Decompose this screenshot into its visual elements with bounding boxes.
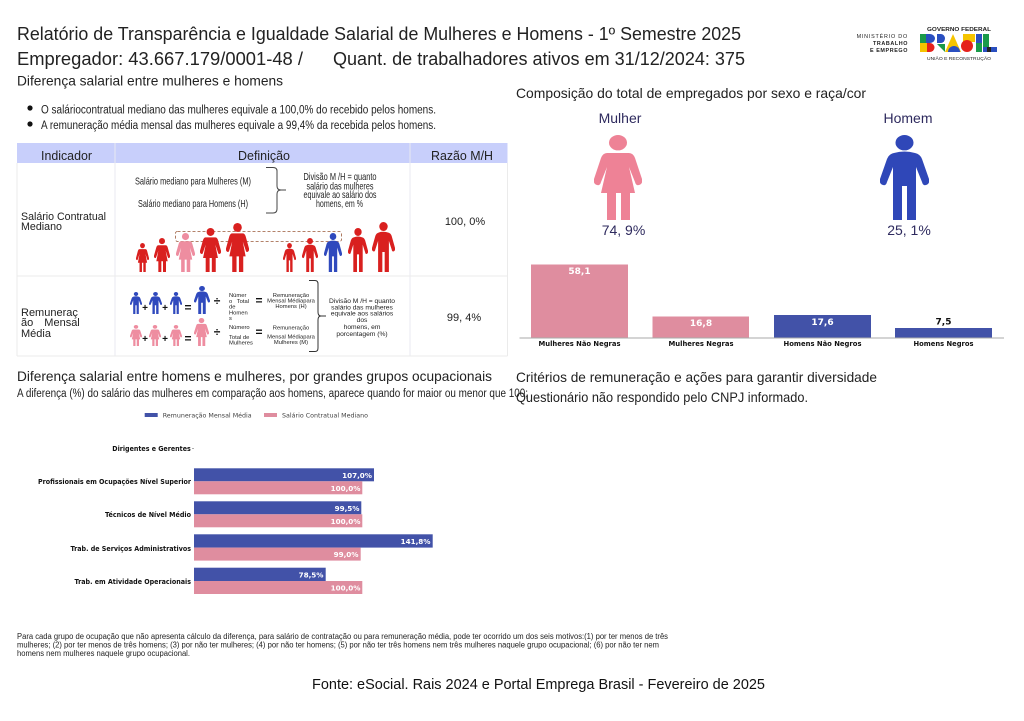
row label: remuneração <box>21 307 80 340</box>
footnote: Para cada grupo de ocupação que não apresenta cálculo da diferença, para salário de contratação ou para remuneração média, pode ter ocorrido um dos seis motivos:(1) por ter menos de três <box>17 632 668 641</box>
bars: operacionais: 100,0% <box>331 584 360 592</box>
logo: ministério and governo federal: MINISTÉRIO DO <box>857 33 908 40</box>
brace <box>309 280 326 352</box>
definition: número de homens e mulheres: de <box>229 304 235 310</box>
bar chart: composição por sexo e raça: Mulheres Não Negras <box>538 340 620 348</box>
text: questionário: Questionário não respondido pelo CNPJ informado. <box>516 389 808 405</box>
definition: salário mediano <box>135 168 377 213</box>
category labels: Trab. de Serviços Administrativos <box>70 545 191 553</box>
table header: Indicador <box>41 148 93 163</box>
bullet list: A remuneração média mensal das mulheres equivale a 99,4% da recebida pelos homens. <box>41 120 436 132</box>
icons: remuneração homens: = <box>184 300 192 314</box>
bars: administrativos: 99,0% <box>334 550 358 559</box>
category labels <box>38 445 194 586</box>
icons: remuneração homens: = <box>255 294 263 308</box>
definition: divisão M/H: equivale aos salários <box>331 310 394 318</box>
heading: critérios de remuneração: Critérios de remuneração e ações para garantir diversidade <box>516 369 877 385</box>
heading: diferença por grupos ocupacionais: Diferença salarial entre homens e mulheres, por grandes grupos ocupacionais <box>17 368 492 384</box>
definition: salário mediano: Divisão M /H = quanto <box>304 171 377 183</box>
bars: administrativos <box>194 534 433 561</box>
icons: remuneração homens: ÷ <box>214 294 221 308</box>
definition: número de homens e mulheres <box>229 293 253 346</box>
logo: ministério and governo federal: E EMPREGO <box>870 48 908 54</box>
bars: operacionais <box>194 568 362 594</box>
icons: remuneração mulheres: ÷ <box>214 325 221 339</box>
panel: tabela de indicadores <box>17 143 508 356</box>
bars: técnicos: 99,5% <box>335 504 360 513</box>
bar chart: composição por sexo e raça: 17,6 <box>811 318 834 328</box>
footnote: homens nem mulheres naquele grupo ocupacional. <box>17 649 190 658</box>
icons: remuneração mulheres: + <box>162 334 168 345</box>
icons: remuneração homens: + <box>162 303 168 314</box>
title: Relatório de Transparência e Igualdade Salarial de Mulheres e Homens - 1º Semestre 2025 <box>17 24 741 44</box>
definition: salário mediano: homens, em % <box>316 198 363 210</box>
definition: salário mediano: salário das mulheres <box>306 180 374 192</box>
definition: número de homens e mulheres: s <box>229 316 232 322</box>
source: Fonte: eSocial. Rais 2024 e Portal Emprega Brasil - Fevereiro de 2025 <box>312 676 765 693</box>
icons: remuneração mulheres: = <box>255 325 263 339</box>
definition: número de homens e mulheres: Total de <box>229 335 249 341</box>
bar chart: composição por sexo e raça <box>520 264 1004 348</box>
bar chart: composição por sexo e raça: Mulheres Negras <box>668 340 734 348</box>
category labels: Técnicos de Nível Médio <box>105 511 191 519</box>
icons: mediana <box>136 222 395 272</box>
employer line: Empregador: 43.667.179/0001-48 / <box>17 49 303 69</box>
icons: remuneração mulheres <box>130 318 263 346</box>
table header: Razão M/H <box>431 148 493 163</box>
category labels: Dirigentes e Gerentes <box>112 445 191 453</box>
category labels: Trab. em Atividade Operacionais <box>74 578 191 586</box>
bars: profissionais: 100,0% <box>331 484 360 493</box>
definition: remuneração mensal média: Remuneração <box>273 293 309 299</box>
row label: salário contratual: Mediano <box>21 221 62 233</box>
definition: divisão M/H <box>329 298 395 338</box>
icons: remuneração mulheres: + <box>142 334 148 345</box>
bullet list: O saláriocontratual mediano das mulheres equivale a 100,0% do recebido pelos homens. <box>41 104 436 116</box>
definition: divisão M/H: Divisão M /H = quanto <box>329 298 395 305</box>
definition: remuneração mensal média: Mensal Médiapara <box>267 334 316 340</box>
definition: remuneração mensal média: Mensal Médiapara <box>267 298 316 304</box>
logo: ministério and governo federal: TRABALHO <box>873 41 908 47</box>
panel: mulher: Mulher <box>599 110 642 126</box>
logo: ministério and governo federal: UNIÃO E RECONSTRUÇÃO <box>927 55 991 62</box>
bars: técnicos <box>194 501 362 527</box>
bar chart: composição por sexo e raça: 16,8 <box>690 319 712 329</box>
panel: mulher: 74, 9% <box>602 222 645 238</box>
heading: diferença salarial: Diferença salarial entre mulheres e homens <box>17 72 283 88</box>
definition: divisão M/H: porcentagem (%) <box>336 331 388 338</box>
definition: remuneração mensal média: Homens (H) <box>275 304 307 310</box>
definition: divisão M/H: salário das mulheres <box>331 304 394 312</box>
definition: número de homens e mulheres: Número <box>229 325 250 331</box>
bar chart: grupos ocupacionais <box>38 445 433 594</box>
category labels: Profissionais em Ocupações Nível Superior <box>38 478 192 486</box>
employer line: Quant. de trabalhadores ativos em 31/12/2024: 375 <box>333 49 745 69</box>
panel: mulher <box>594 110 645 238</box>
bars: profissionais: 107,0% <box>342 471 372 480</box>
icons: remuneração homens <box>130 286 263 314</box>
definition: salário mediano: Salário mediano para Homens (H) <box>138 198 248 210</box>
row label: remuneração: Média <box>21 328 52 340</box>
bars: técnicos: 100,0% <box>331 517 360 526</box>
legend: Salário Contratual Mediano <box>282 412 368 420</box>
legend: Remuneração Mensal Média <box>163 412 252 420</box>
icon: mulher <box>594 135 642 220</box>
bars: administrativos: 141,8% <box>401 537 430 546</box>
row label: salário contratual: Salário Contratual <box>21 211 106 223</box>
definition: remuneração mensal média: Remuneração <box>273 326 309 332</box>
bars: profissionais <box>194 468 374 494</box>
row label: salário contratual <box>21 211 106 233</box>
logo: ministério and governo federal: GOVERNO FEDERAL <box>927 27 992 33</box>
definition: divisão M/H: dos <box>357 317 368 324</box>
definition: salário mediano: equivale ao salário dos <box>304 189 376 201</box>
heading: composição: Composição do total de empregados por sexo e raça/cor <box>516 85 866 101</box>
bar chart: composição por sexo e raça: Homens Não Negros <box>784 340 862 348</box>
row value: 100, 0%: 100, 0% <box>445 216 485 228</box>
row label: remuneração: ão Mensal <box>21 317 80 329</box>
definition: número de homens e mulheres: Númer <box>229 293 246 299</box>
employer line <box>17 49 745 69</box>
table header <box>41 148 493 163</box>
panel: homem: Homem <box>883 110 933 126</box>
panel: homem: 25, 1% <box>887 222 931 238</box>
definition: remuneração mensal média <box>267 293 316 346</box>
table header: Definição <box>238 148 290 163</box>
panel: homem <box>880 110 933 238</box>
bar chart: composição por sexo e raça: 7,5 <box>936 318 951 328</box>
logo: ministério and governo federal <box>857 27 997 62</box>
icons: remuneração homens: + <box>142 303 148 314</box>
subtitle: diferença percentual: A diferença (%) do salário das mulheres em comparação aos homens, aparece quando for maior ou menor que 100; <box>17 388 528 400</box>
definition: remuneração mensal média: Mulheres (M) <box>274 340 308 346</box>
row label: remuneração: Remuneraç <box>21 307 78 319</box>
bars: operacionais: 78,5% <box>299 570 324 579</box>
definition: divisão M/H: homens, em <box>344 324 381 331</box>
definition: número de homens e mulheres: o Total <box>229 299 249 305</box>
legend <box>145 412 368 420</box>
footnote <box>17 632 668 658</box>
definition: número de homens e mulheres: Mulheres <box>229 340 253 346</box>
icons: remuneração mulheres: = <box>184 332 192 346</box>
bullet list <box>27 104 436 132</box>
row value: 99, 4%: 99, 4% <box>447 312 481 324</box>
bar chart: composição por sexo e raça: Homens Negros <box>914 340 974 348</box>
definition: número de homens e mulheres: Homen <box>229 310 248 316</box>
definition: salário mediano: Salário mediano para Mulheres (M) <box>135 176 251 188</box>
footnote: mulheres; (2) por ter menos de três homens; (3) por não ter mulheres; (4) por não ter homens; (5) por não ter três homens nem três mulheres naquele grupo ocupacional; (6) por não ter nem <box>17 640 659 650</box>
bar chart: composição por sexo e raça: 58,1 <box>568 267 591 277</box>
icon: homem <box>880 135 929 220</box>
